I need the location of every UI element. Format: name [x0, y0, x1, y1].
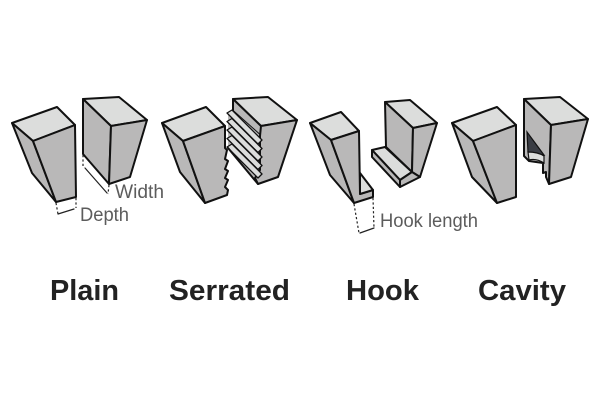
serrated corbel left block — [162, 107, 228, 203]
plain corbel left block — [12, 107, 76, 202]
width dimension: Width — [115, 182, 164, 203]
hook length dimension: Hook length — [380, 211, 478, 232]
cavity corbel left block — [452, 107, 516, 203]
label: Cavity: Cavity — [478, 275, 566, 307]
label: Serrated: Serrated — [169, 275, 290, 307]
hook corbel right block — [372, 100, 437, 187]
width dimension — [83, 155, 164, 203]
depth dimension: Depth — [80, 205, 129, 226]
plain corbel right block — [83, 97, 147, 184]
cavity recess — [527, 132, 544, 163]
depth dimension — [56, 198, 129, 226]
teeth — [227, 110, 262, 184]
label: Hook: Hook — [346, 275, 420, 307]
serrated corbel right block — [227, 97, 297, 184]
label: Plain: Plain — [50, 275, 119, 307]
cavity corbel right block — [524, 97, 588, 184]
hook corbel left block — [310, 112, 373, 203]
hook length dimension — [354, 198, 478, 233]
